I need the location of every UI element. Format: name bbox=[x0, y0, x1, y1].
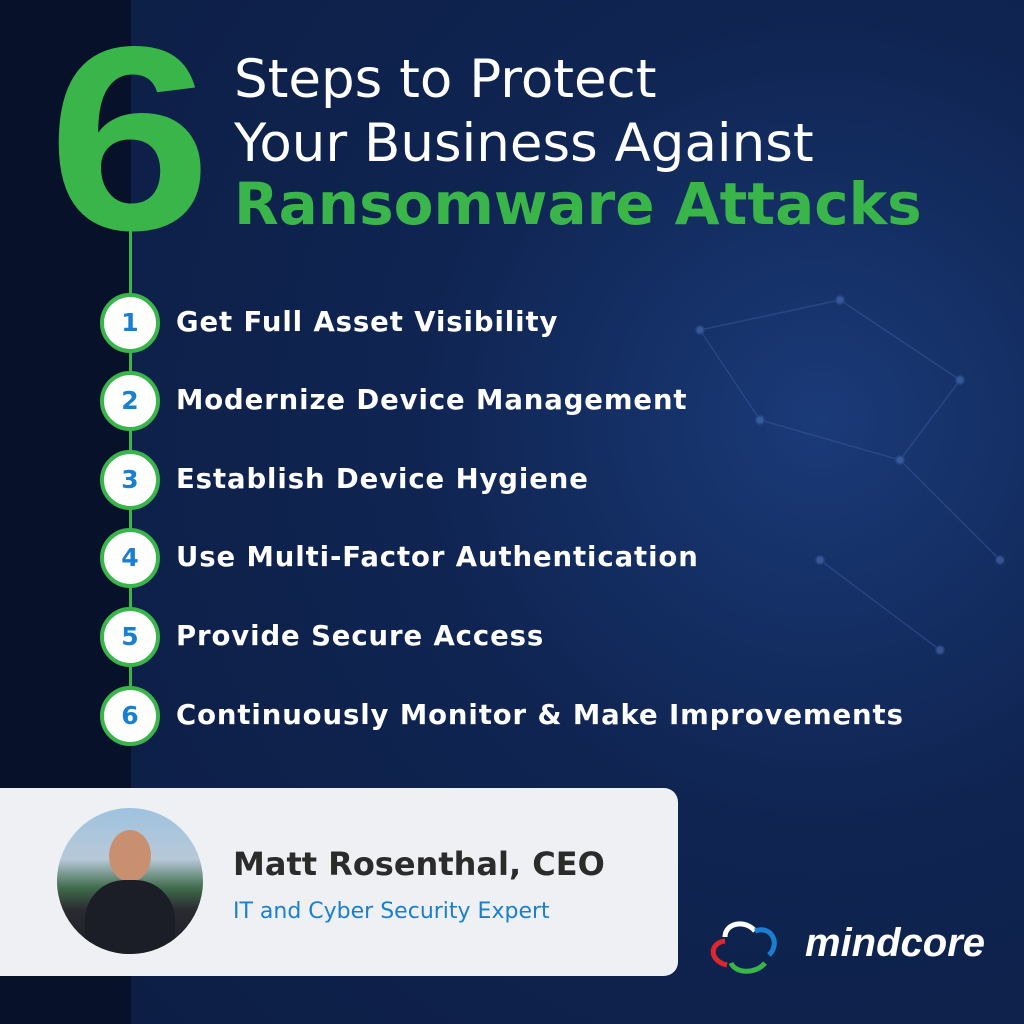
title: Your Business Against bbox=[234, 113, 814, 174]
step 4: Use Multi-Factor Authentication bbox=[176, 541, 699, 573]
step 3: 3 bbox=[121, 465, 139, 494]
title bbox=[234, 49, 814, 174]
step 1: 1 bbox=[121, 308, 139, 337]
step 6: Continuously Monitor & Make Improvements bbox=[176, 699, 904, 731]
step 5: 5 bbox=[121, 622, 139, 651]
step 4 bbox=[100, 528, 699, 588]
step 6: 6 bbox=[121, 701, 139, 730]
step 5: Provide Secure Access bbox=[176, 620, 544, 652]
logo bbox=[710, 921, 985, 974]
step 2 bbox=[100, 371, 687, 431]
step 3 bbox=[100, 450, 589, 510]
step 1: Get Full Asset Visibility bbox=[176, 306, 558, 338]
name: Matt Rosenthal, CEO bbox=[233, 845, 605, 883]
step 1 bbox=[100, 293, 558, 353]
step 5 bbox=[100, 607, 544, 667]
step 6 bbox=[100, 686, 904, 746]
timeline line bbox=[129, 225, 132, 720]
step 4: 4 bbox=[121, 543, 139, 572]
big number 6: 6 bbox=[48, 0, 211, 285]
title highlight: Ransomware Attacks bbox=[234, 170, 922, 238]
icon: cloud arrows bbox=[710, 921, 777, 974]
wordmark: mindcore bbox=[805, 921, 985, 965]
steps list bbox=[100, 293, 904, 746]
photo bbox=[57, 808, 203, 954]
subtitle: IT and Cyber Security Expert bbox=[233, 899, 550, 924]
step 2: Modernize Device Management bbox=[176, 384, 687, 416]
step 2: 2 bbox=[121, 386, 139, 415]
author card bbox=[0, 788, 678, 976]
title: Steps to Protect bbox=[234, 49, 657, 110]
step 3: Establish Device Hygiene bbox=[176, 463, 589, 495]
